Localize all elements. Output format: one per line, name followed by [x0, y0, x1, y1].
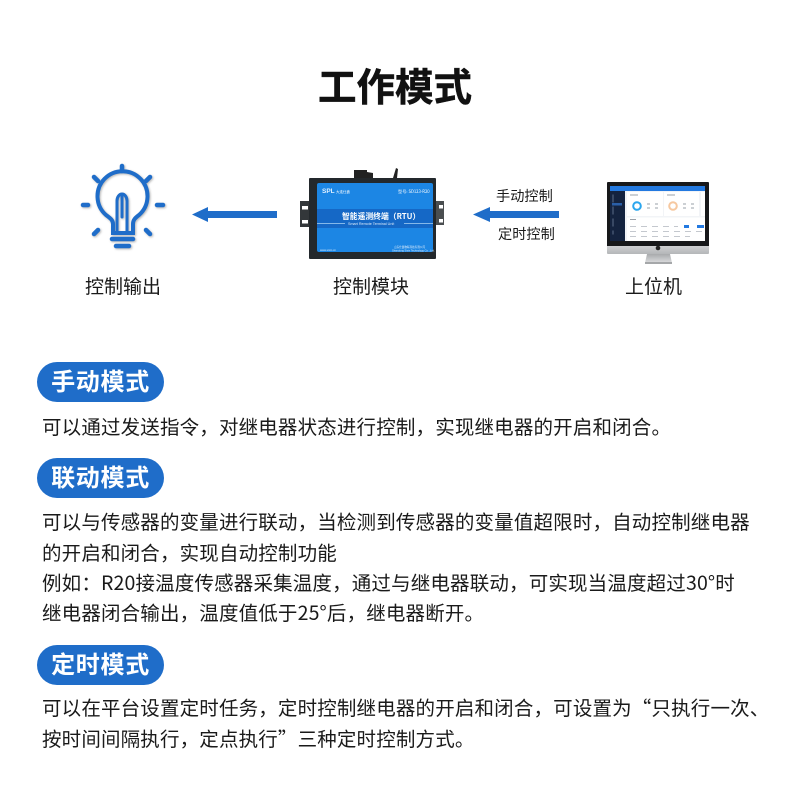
label: control module: 控制模块	[333, 272, 409, 299]
icon: RTU control module: 山东仕鑫物联科技有限公司	[394, 245, 426, 249]
text: linked mode description: 可以与传感器的变量进行联动，当检测到传感器的变量值超限时，自动控制继电器	[42, 506, 750, 535]
label: manual control: 手动控制	[496, 186, 553, 206]
text: manual mode description: 可以通过发送指令，对继电器状态进行控制，实现继电器的开启和闭合。	[42, 411, 671, 440]
icon: RTU control module: 型号: SD123-R20	[398, 188, 430, 195]
label: host computer: 上位机	[625, 272, 682, 299]
heading: manual mode: 手动模式	[51, 362, 150, 397]
icon: RTU control module: 大连仕鑫	[336, 189, 350, 195]
icon: RTU control module: www.sixin.cn	[320, 248, 336, 252]
heading: scheduled mode	[37, 645, 164, 685]
heading: manual mode	[37, 362, 164, 402]
icon: RTU control module: 智能遥测终端（RTU）	[342, 211, 420, 222]
text: linked mode description: 的开启和闭合，实现自动控制功能	[42, 537, 337, 566]
text: scheduled mode description: 按时间间隔执行，定点执行”三种定时控制方式。	[42, 723, 475, 752]
text: scheduled mode description: 可以在平台设置定时任务，定时控制继电器的开启和闭合，可设置为“只执行一次、	[42, 692, 769, 721]
text: linked mode description: 继电器闭合输出，温度值低于25°后，继电器断开。	[42, 597, 484, 626]
icon: host computer monitor	[607, 182, 709, 264]
icon: RTU control module: Shandong Sixin Technology Co., Ltd.	[392, 248, 435, 252]
label: scheduled control: 定时控制	[498, 224, 555, 244]
title: 工作模式	[318, 57, 472, 113]
icon: RTU control module: Smart Remote Terminal Unit	[348, 222, 394, 226]
icon: RTU control module	[300, 168, 444, 259]
icon: light bulb	[80, 164, 168, 250]
text: linked mode description: 例如：R20接温度传感器采集温度，通过与继电器联动，可实现当温度超过30°时	[42, 567, 735, 596]
heading: linked mode	[37, 458, 164, 498]
arrow: to control module	[473, 207, 559, 222]
label: control output: 控制输出	[85, 272, 161, 299]
text: linked mode description	[42, 506, 750, 626]
heading: linked mode: 联动模式	[51, 458, 150, 493]
text: scheduled mode description	[42, 692, 769, 752]
heading: scheduled mode: 定时模式	[51, 645, 150, 680]
arrow: to control output	[192, 207, 277, 222]
icon: RTU control module: SPL	[322, 188, 335, 195]
